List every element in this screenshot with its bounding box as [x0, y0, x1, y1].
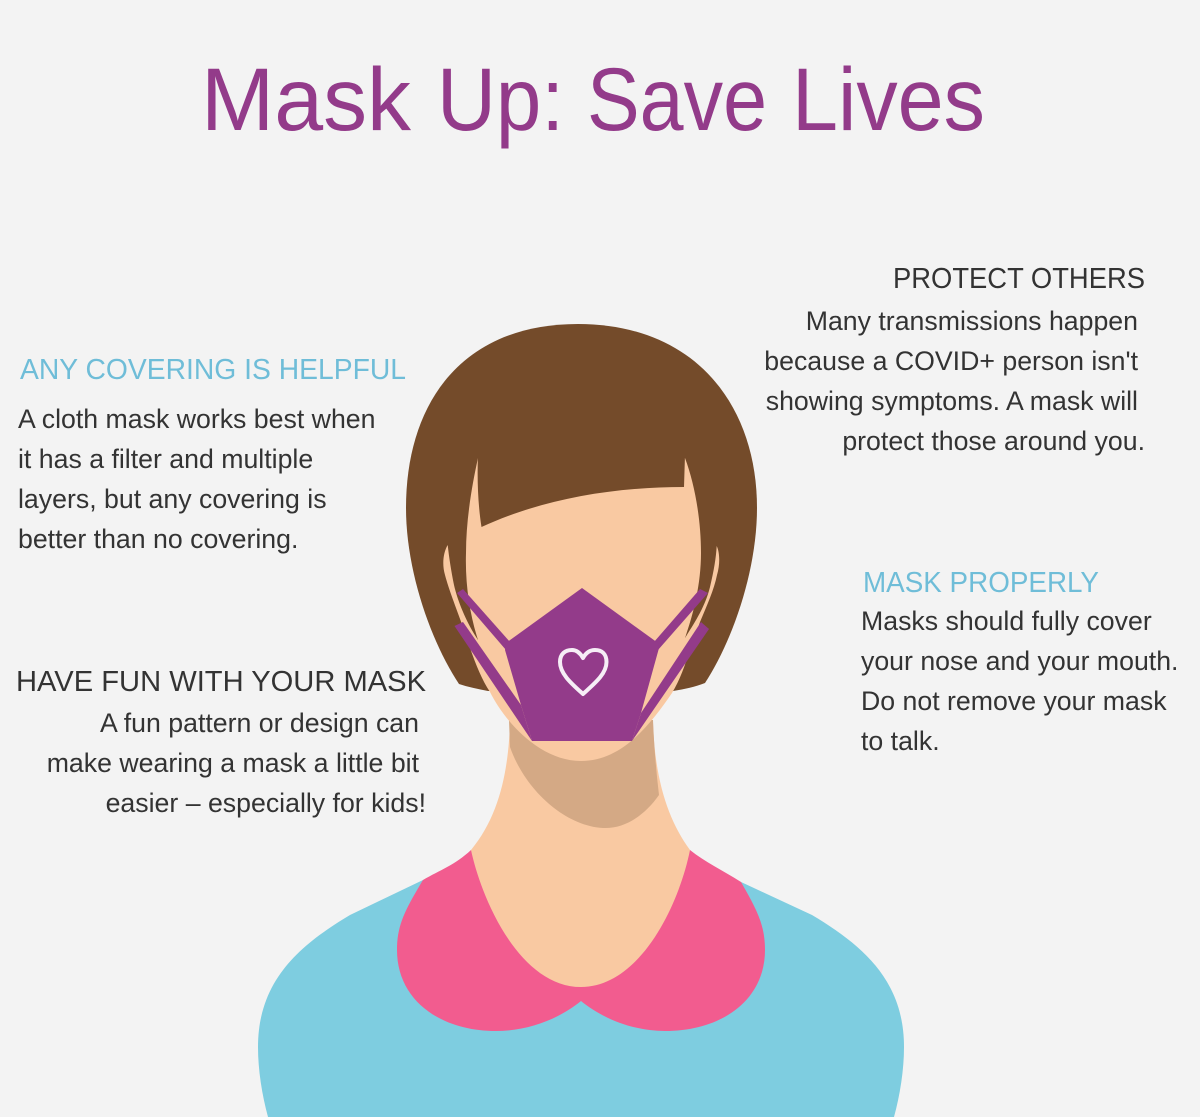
- mask body: [505, 588, 659, 741]
- text block: [18, 404, 375, 554]
- hair: [406, 324, 757, 691]
- neck: [471, 723, 690, 987]
- text block: to talk.: [861, 726, 940, 756]
- heading: ANY COVERING IS HELPFUL: [20, 354, 406, 386]
- panel: mask properly: [861, 567, 1178, 756]
- text block: [47, 708, 426, 818]
- icon: heart: [560, 650, 606, 694]
- title: Save: [587, 49, 767, 149]
- collar: [397, 850, 765, 1031]
- text block: make wearing a mask a little bit: [47, 748, 420, 778]
- text block: better than no covering.: [18, 524, 298, 554]
- text block: easier – especially for kids!: [106, 788, 426, 818]
- neck shadow: [509, 720, 659, 828]
- fringe: [478, 455, 685, 527]
- title: Lives: [792, 49, 985, 149]
- text block: Masks should fully cover: [861, 606, 1152, 636]
- text block: Many transmissions happen: [806, 306, 1138, 336]
- shirt: [258, 860, 904, 1117]
- illustration: woman wearing a mask: [258, 324, 904, 1117]
- text block: layers, but any covering is: [18, 484, 327, 514]
- text block: it has a filter and multiple: [18, 444, 313, 474]
- panel: protect others: [764, 263, 1145, 456]
- text block: A fun pattern or design can: [100, 708, 419, 738]
- text block: Do not remove your mask: [861, 686, 1167, 716]
- face mask: [454, 588, 709, 741]
- heading: HAVE FUN WITH YOUR MASK: [16, 666, 427, 698]
- title: [201, 49, 985, 149]
- text block: protect those around you.: [842, 426, 1145, 456]
- text block: [861, 606, 1178, 756]
- panel: any covering is helpful: [18, 354, 406, 554]
- title: Mask: [201, 49, 411, 149]
- heading: MASK PROPERLY: [863, 567, 1099, 599]
- text block: A cloth mask works best when: [18, 404, 375, 434]
- mask straps: [454, 589, 709, 741]
- panel: have fun with your mask: [16, 666, 427, 818]
- text block: [764, 306, 1145, 456]
- left ear: [443, 545, 480, 650]
- heading: PROTECT OTHERS: [893, 263, 1145, 295]
- text block: your nose and your mouth.: [861, 646, 1178, 676]
- text block: because a COVID+ person isn't: [764, 346, 1139, 376]
- title: Up:: [437, 49, 564, 149]
- text block: showing symptoms. A mask will: [766, 386, 1138, 416]
- face: [466, 458, 701, 761]
- right ear: [683, 546, 719, 650]
